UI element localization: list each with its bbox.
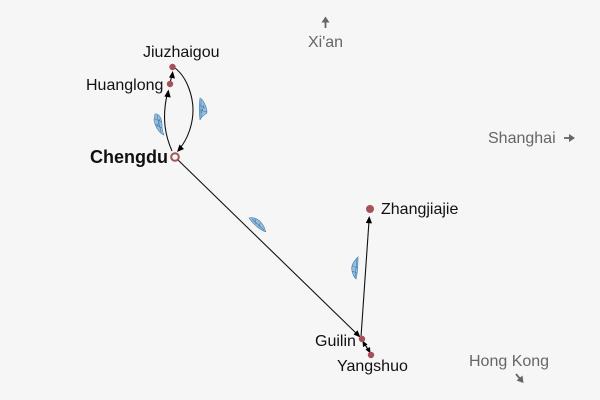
label: Guilin: Guilin	[315, 333, 356, 350]
arrow: Hong Kong	[516, 374, 524, 383]
route: Huanglong to Jiuzhaigou	[169, 71, 175, 83]
arrow: Shanghai	[564, 134, 575, 142]
marker: Guilin	[359, 336, 365, 342]
label: Shanghai: Shanghai	[488, 130, 556, 147]
label: Xi'an: Xi'an	[308, 34, 343, 51]
marker: Chengdu	[171, 153, 179, 161]
route: Guilin to Zhangjiajie	[361, 216, 372, 337]
arrow: Xi'an	[322, 16, 330, 28]
label: Jiuzhaigou: Jiuzhaigou	[143, 44, 220, 61]
marker: Jiuzhaigou	[169, 64, 176, 70]
marker: Zhangjiajie	[366, 205, 374, 213]
marker: Yangshuo	[368, 352, 374, 358]
icon: plane on Guilin to Zhangjiajie route	[352, 257, 358, 279]
label: Yangshuo: Yangshuo	[337, 358, 408, 375]
icon: plane on Chengdu to Guilin route	[249, 218, 266, 232]
label: Zhangjiajie: Zhangjiajie	[381, 201, 458, 218]
route: Guilin to Yangshuo	[362, 340, 370, 354]
label: Huanglong: Huanglong	[86, 77, 163, 94]
label: Chengdu: Chengdu	[90, 147, 168, 167]
route: Chengdu to Huanglong	[164, 90, 172, 151]
icon: plane right of Jiuzhaigou route	[199, 98, 207, 120]
route: Jiuzhaigou to Chengdu	[175, 68, 193, 152]
icon: plane left of Huanglong route	[154, 114, 164, 135]
marker: Huanglong	[167, 81, 173, 87]
route: Chengdu to Guilin	[177, 159, 360, 338]
label: Hong Kong: Hong Kong	[469, 353, 549, 370]
